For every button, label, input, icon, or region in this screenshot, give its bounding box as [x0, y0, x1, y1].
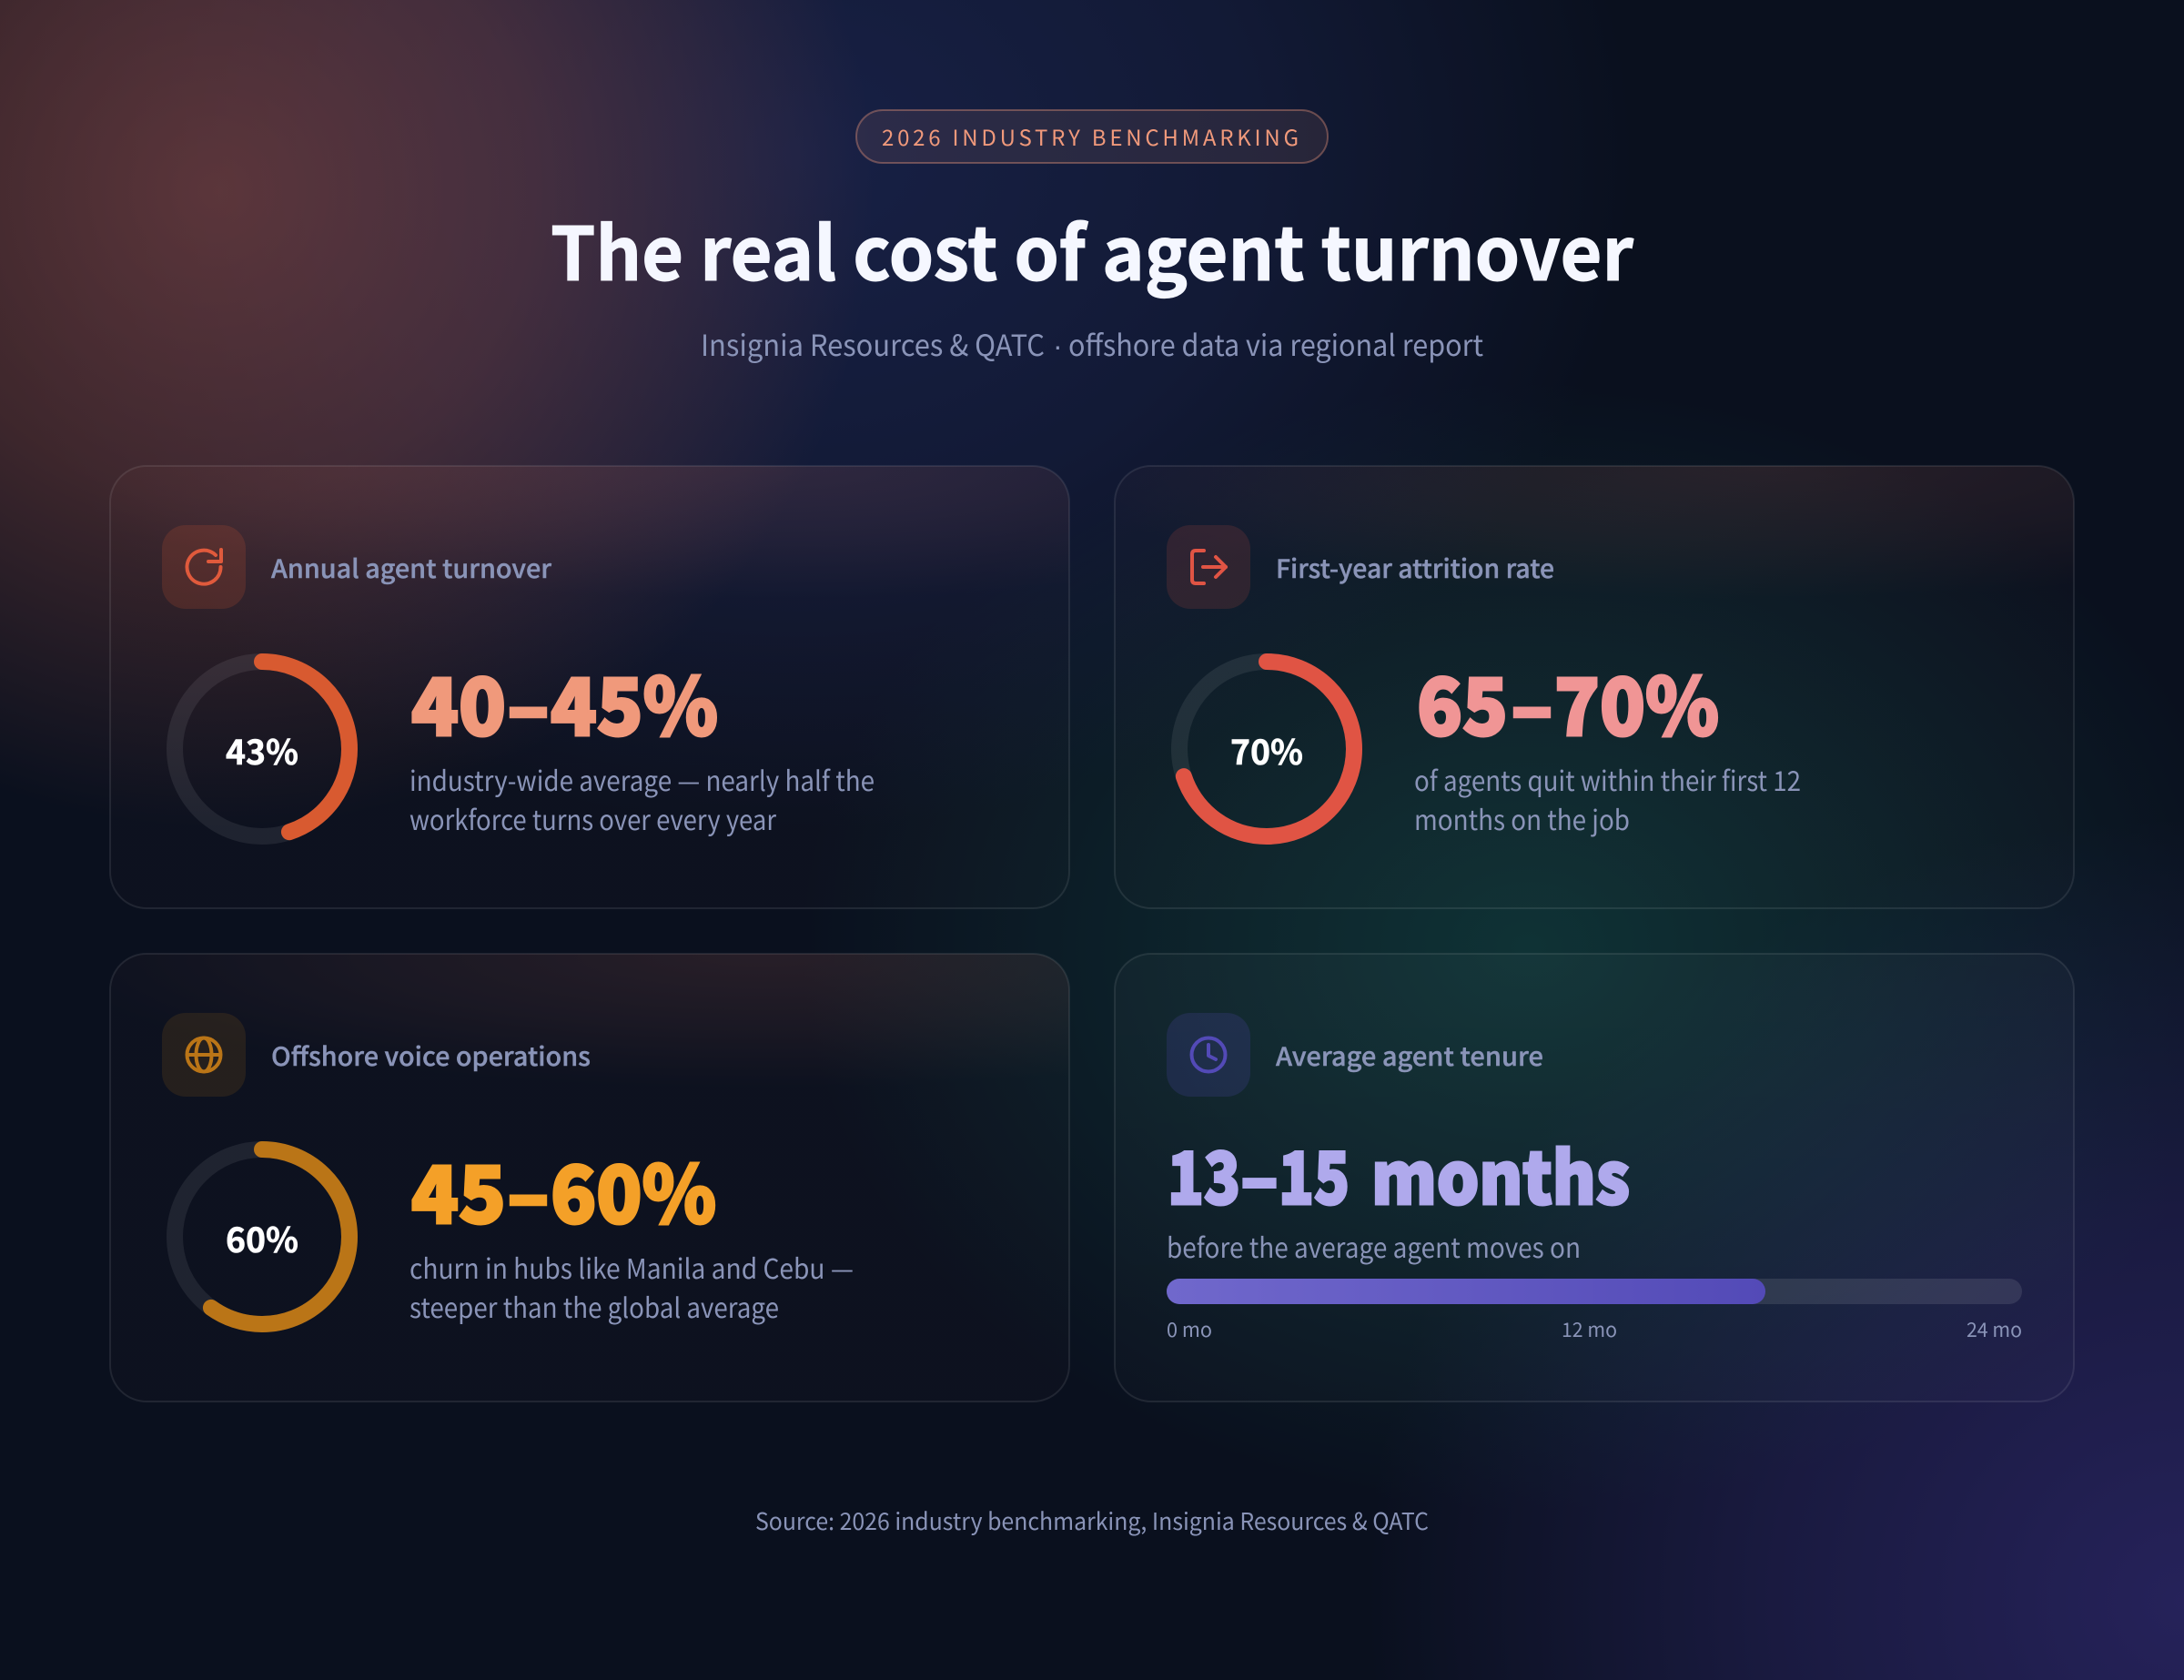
- donut chart: 70%: 70%: [1230, 724, 1303, 774]
- description: of agents quit within their first 12: [1414, 759, 1801, 799]
- big number: –: [1240, 1120, 1279, 1225]
- donut chart: 43%: [175, 662, 349, 836]
- panel: annual agent turnover: [110, 466, 1069, 908]
- big number: 15: [1279, 1120, 1350, 1225]
- subtitle: ·: [1053, 329, 1063, 362]
- description: [410, 1247, 854, 1326]
- description: churn in hubs like Manila and Cebu —: [410, 1247, 854, 1287]
- big number: –: [507, 644, 550, 759]
- big number: months: [1371, 1120, 1630, 1225]
- bar axis labels: [1167, 1314, 2022, 1343]
- donut chart: 60%: [175, 1149, 349, 1324]
- big number: [1417, 644, 1719, 759]
- subtitle: Insignia Resources & QATC: [701, 323, 1045, 365]
- subtitle: [701, 323, 1483, 365]
- big number: [411, 644, 718, 759]
- panel: offshore voice operations: [110, 954, 1069, 1402]
- description: steeper than the global average: [410, 1286, 779, 1326]
- donut chart: 43%: 43%: [226, 724, 298, 774]
- bar axis labels: 0 mo: [1167, 1314, 1212, 1343]
- bar axis labels: 24 mo: [1967, 1314, 2022, 1343]
- big number: 13: [1168, 1120, 1240, 1225]
- big number: 40: [411, 644, 506, 759]
- title: The real cost of agent turnover: [551, 196, 1634, 302]
- big number: –: [507, 1132, 550, 1247]
- icon: exit arrow: [1167, 525, 1250, 609]
- header badge: 2026 INDUSTRY BENCHMARKING: [882, 120, 1299, 152]
- description: industry-wide average — nearly half the: [410, 759, 875, 799]
- source footer: Source: 2026 industry benchmarking, Insignia Resources & QATC: [755, 1503, 1429, 1537]
- panel: average agent tenure: [1115, 954, 2074, 1402]
- big number: –: [1511, 644, 1553, 759]
- description: before the average agent moves on: [1167, 1226, 1581, 1266]
- description: months on the job: [1414, 798, 1630, 838]
- big number: 45: [411, 1132, 506, 1247]
- bar axis labels: 12 mo: [1562, 1314, 1617, 1343]
- big number: 65: [1417, 644, 1508, 759]
- description: [410, 759, 875, 838]
- label: Annual agent turnover: [271, 550, 552, 586]
- label: Offshore voice operations: [271, 1037, 591, 1074]
- big number: 60%: [551, 1132, 716, 1247]
- big number: 45%: [551, 644, 718, 759]
- big number: 70%: [1554, 644, 1719, 759]
- header badge: [856, 110, 1328, 163]
- icon: refresh arrow: [162, 525, 246, 609]
- big number: [411, 1132, 716, 1247]
- subtitle: offshore data via regional report: [1068, 323, 1483, 365]
- label: First-year attrition rate: [1276, 550, 1554, 586]
- donut chart: 60%: 60%: [226, 1212, 298, 1262]
- progress bar: [1167, 1279, 2022, 1304]
- donut chart: 70%: [1179, 662, 1354, 836]
- description: [1414, 759, 1801, 838]
- label: Average agent tenure: [1276, 1037, 1543, 1074]
- icon: clock: [1167, 1013, 1250, 1097]
- icon: globe: [162, 1013, 246, 1097]
- big number: [1168, 1120, 1630, 1225]
- panel: first-year attrition rate: [1115, 466, 2074, 908]
- description: workforce turns over every year: [410, 798, 776, 838]
